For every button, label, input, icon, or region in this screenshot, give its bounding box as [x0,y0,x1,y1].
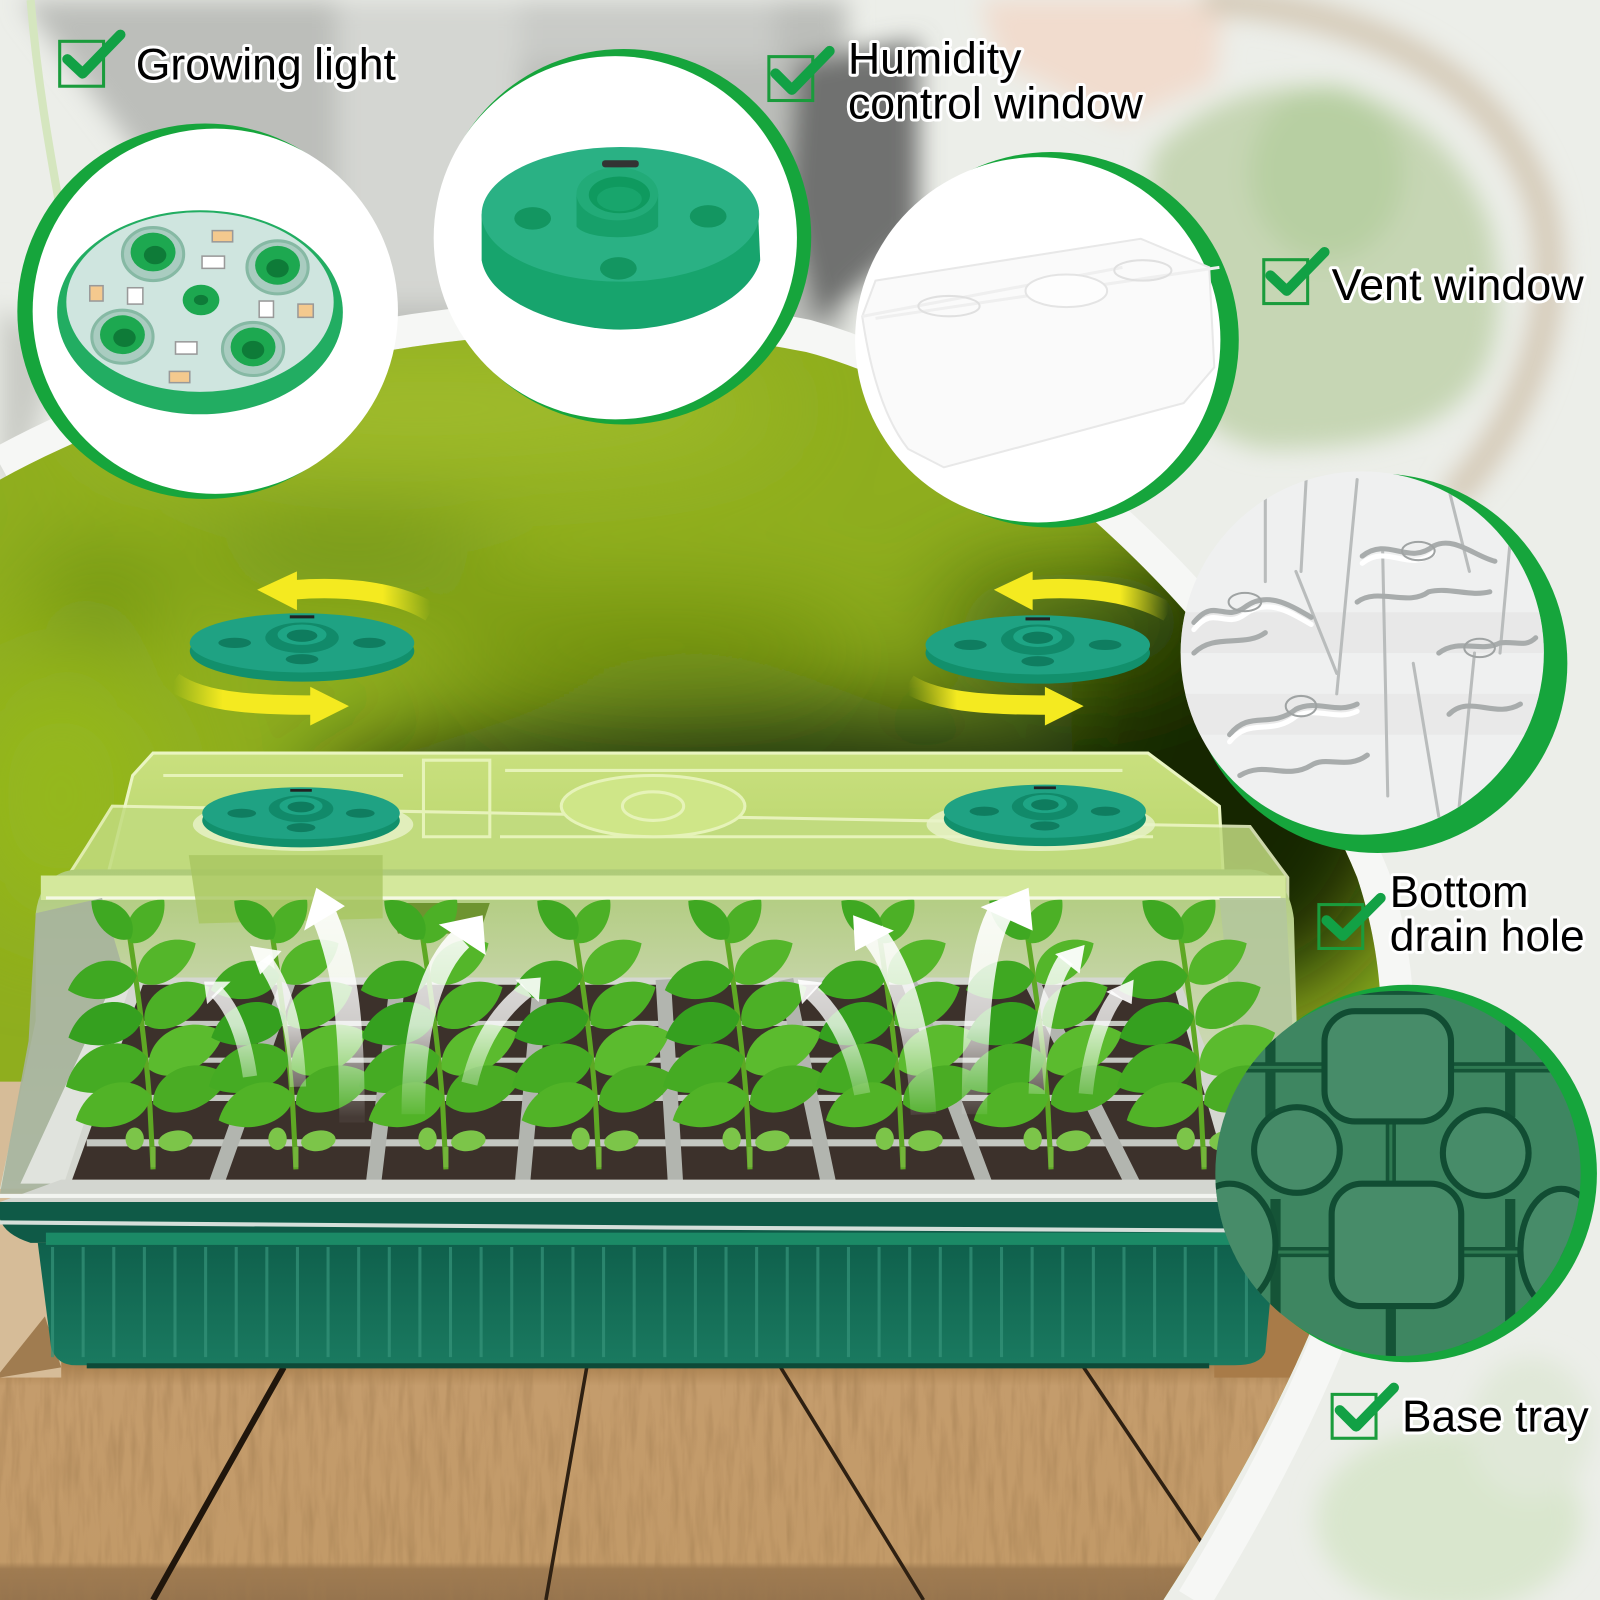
white band around main scene [0,317,1397,1600]
rotation arrow: right bottom [908,684,1084,726]
dark back wells [189,855,383,923]
panel: growing light [17,123,398,499]
dome lid [0,753,1301,1194]
icon: vent cap [482,147,760,330]
label: growing light: Growing light [136,39,396,90]
tray underside pattern [1216,990,1580,1356]
seed cell tray with soil [0,978,1260,1202]
panel: main scene [0,306,1449,1600]
panel: vent window [855,152,1239,528]
vent recess details [163,760,1153,837]
middle lid step [41,806,1288,918]
scene backdrop: blurred green foliage [0,306,1449,1600]
arrow 3 [974,888,1033,1114]
label: bottom drain hole: Bottom [1390,866,1529,917]
panel: humidity control window [434,49,811,424]
lid highlight band [41,876,1286,900]
airflow arrows: right group [798,888,1134,1114]
rotation arrow: left top [257,571,431,612]
arrow 4 [413,915,486,1114]
arrow 2 [853,915,923,1114]
label: bottom drain hole: drain hole [1390,910,1585,961]
icon: clear lid [862,239,1219,467]
arrow 4 [1037,945,1085,1094]
rotation arrow: left bottom [173,682,349,726]
rotation arrow: right top [994,571,1168,612]
arrow 2 [250,946,298,1087]
label: vent window: Vent window [1332,259,1584,310]
right glass side wall [1219,898,1301,1189]
arrow 3 [304,888,352,1122]
seedlings [57,890,1286,1169]
label: base tray [1332,1388,1589,1442]
seed tray base [0,1202,1276,1368]
clear plastic relief [1173,480,1561,816]
label: bottom drain hole [1319,866,1585,961]
panel: clear humidity dome close-up [1173,471,1567,853]
arrow 5 [469,978,541,1084]
rotating vent cap: right [926,615,1150,684]
airflow arrows: left group [204,888,541,1122]
front lid wall [0,869,1301,1189]
left glass side wall [0,898,128,1194]
arrow 1 [798,980,862,1094]
arrow 1 [204,982,250,1077]
panel: bottom drain hole close-up [1215,984,1597,1362]
vent cap on lid: right [927,785,1155,851]
vent cap on lid: left [193,787,413,851]
rotating vent cap: left [190,613,414,682]
label: humidity control window: control window [848,77,1143,128]
label: humidity control window [769,32,1143,128]
wood table [0,1082,1429,1600]
upper lid plate [102,753,1224,898]
label: humidity control window: Humidity [848,32,1022,83]
label: base tray: Base tray [1402,1391,1589,1442]
label: vent window [1264,252,1584,310]
icon: LED light disc [57,210,343,414]
arrow 5 [1086,980,1134,1094]
